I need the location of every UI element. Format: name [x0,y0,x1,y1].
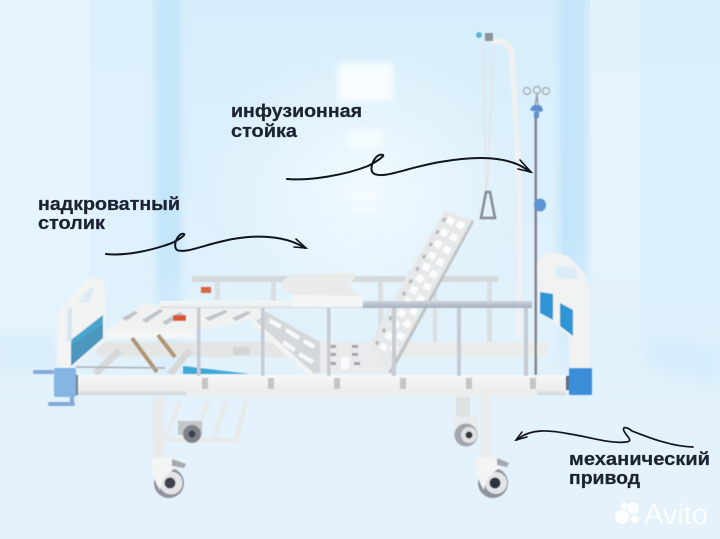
label: механический привод: привод [569,467,640,488]
right headboard [537,253,590,368]
over-bed table [280,273,363,307]
label: механический привод [569,448,710,488]
label: надкроватный столик: надкроватный [38,193,180,214]
trapeze handle and strap [476,32,495,218]
side rail front with posts [160,301,532,376]
watermark: Avito logo: Avito [644,499,708,531]
leg panel [107,287,262,339]
infusion stand pole with hooks [524,86,550,375]
footrest under bed [165,402,246,443]
label: инфузионная стойка: стойка [231,120,298,141]
back frame beam [97,342,547,357]
label: инфузионная стойка: инфузионная [231,100,362,121]
seat panel [320,342,388,373]
label: надкроватный столик [38,193,180,233]
back right caster [453,397,478,446]
main frame [78,375,565,397]
arrow: infusion stand pointer [287,155,531,179]
arrow: mechanical drive pointer [516,428,693,447]
label: инфузионная стойка [231,100,362,141]
bed [33,32,592,498]
right leg and caster [476,397,509,498]
watermark: Avito logo [615,499,708,531]
thigh panel [253,310,320,375]
backrest panel [370,210,474,373]
left blue control block with handles [33,368,78,406]
label: надкроватный столик: столик [38,212,106,233]
left leg and caster [152,397,186,498]
label: механический привод: механический [569,448,710,469]
wooden lifting rods and mechanism [76,335,250,374]
arrow: bedside table pointer [106,234,306,254]
left headboard [57,278,105,367]
right blue end block [566,368,592,395]
back side rail [192,276,498,342]
infusion lift arm [491,41,519,338]
